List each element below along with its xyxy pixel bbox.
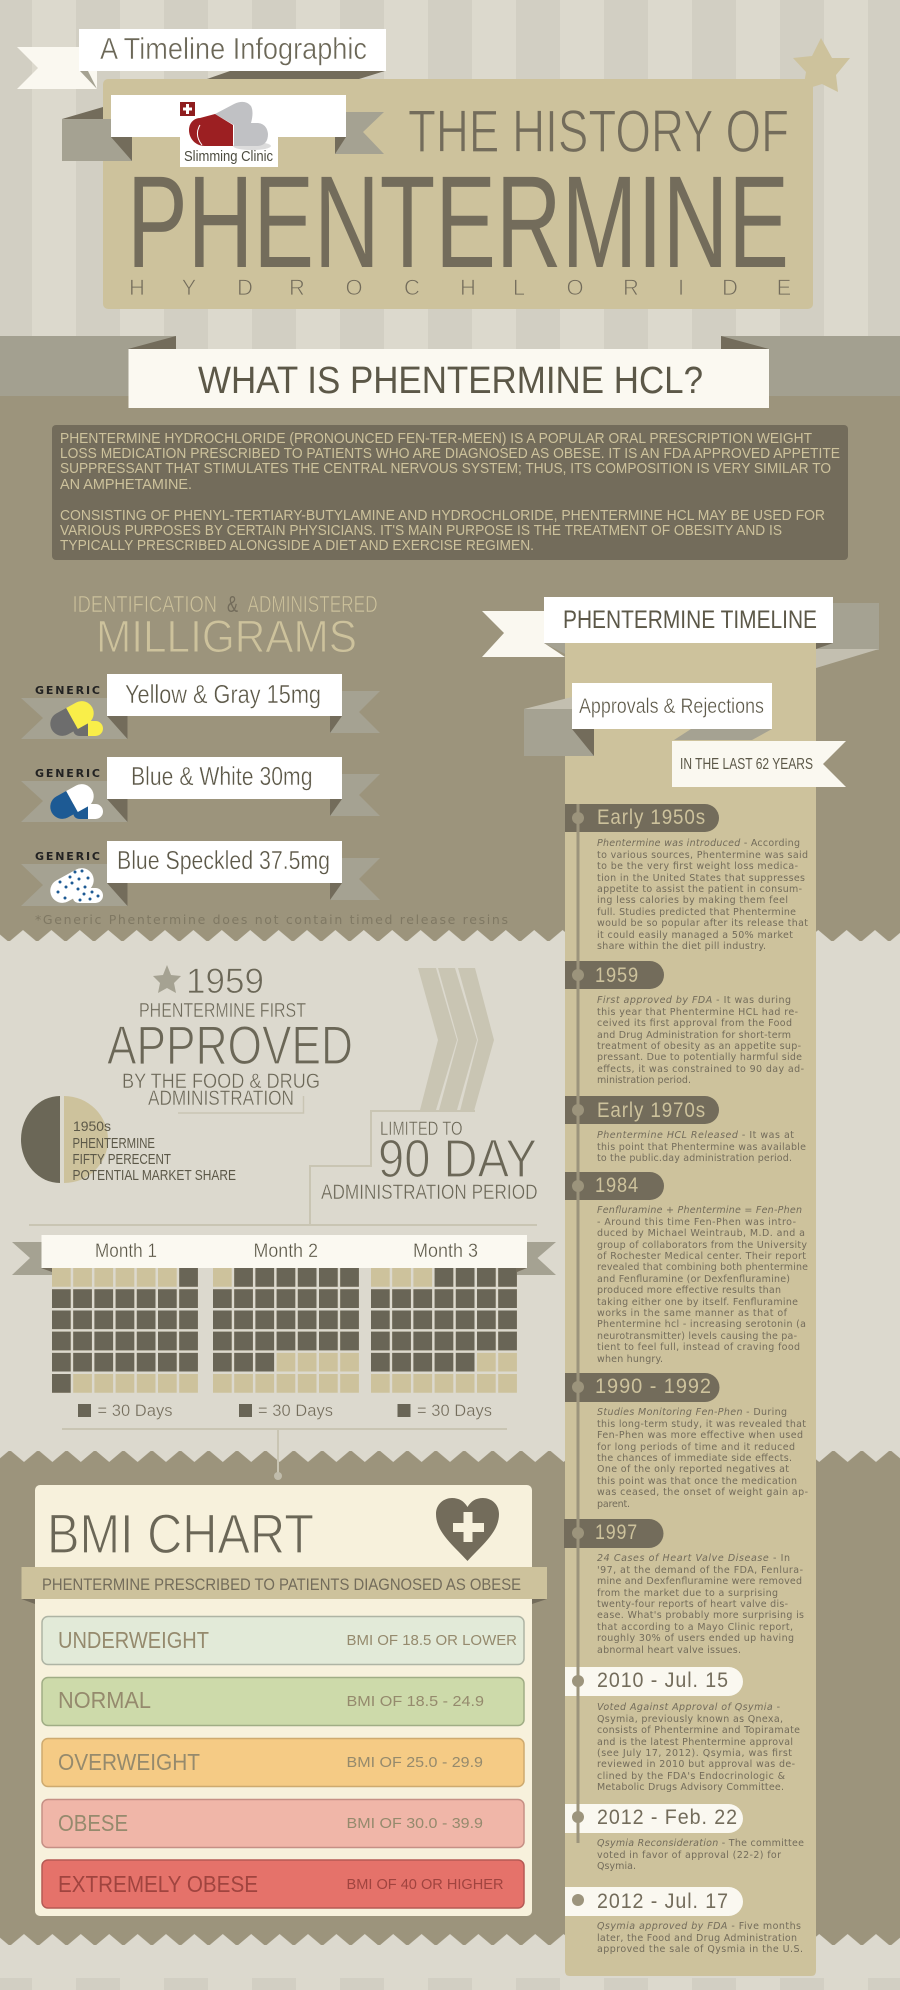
row: normal <box>42 1678 524 1726</box>
timeline entry: early 1950s: to be the very first weight loss medica- <box>597 861 798 872</box>
banner: prescribed to patients diagnosed as obese <box>22 1567 547 1604</box>
timeline entry: 1990 to 1992: Fen-Phen was more effective when used <box>597 1430 803 1441</box>
logo: slimming clinic: Slimming Clinic <box>184 148 273 165</box>
heading: approved: APPROVED <box>107 1014 353 1076</box>
text: paragraph one: LOSS MEDICATION PRESCRIBED TO PATIENTS WHO ARE DIAGNOSED AS OBESE. IT IS AN FDA APPROVED APPETITE <box>60 446 840 462</box>
timeline entry: 1984: 1984 <box>595 1174 639 1197</box>
timeline entry: early 1950s: would be so popular after its release that <box>597 918 808 929</box>
ribbon: a timeline infographic: A Timeline Infographic <box>100 31 367 66</box>
timeline entry: 1997: ease. What's probably more surprising is <box>597 1610 804 1621</box>
arrow: chevrons <box>418 968 494 1111</box>
row: overweight <box>42 1738 524 1786</box>
banner: month labels: Month 2 <box>254 1241 318 1262</box>
timeline entry: 1984: taking either one by itself. Fenfluramine <box>597 1297 798 1308</box>
row: extremely obese <box>42 1860 524 1908</box>
chart: month grids <box>12 1235 556 1420</box>
header panel <box>62 38 850 309</box>
timeline entry: 1959 <box>565 961 804 1086</box>
text: by the food and drug administration <box>122 1070 320 1110</box>
timeline entry: 1984: produced more effective results than <box>597 1285 781 1296</box>
timeline entry: 1959: First approved by FDA - It was during <box>597 995 791 1006</box>
text: phentermine first: PHENTERMINE FIRST <box>139 1000 306 1022</box>
text: paragraph two: VARIOUS PURPOSES BY CERTAIN PHYSICIANS. IT'S MAIN PURPOSE IS THE TREATMENT OF OBESITY AND IS <box>60 523 782 539</box>
timeline entry: 2010 july 15: clined by the FDA's Endocrinologic & <box>597 1771 786 1782</box>
timeline entry: 2012 february 22 <box>565 1804 804 1872</box>
timeline entry: 1997: 1997 <box>595 1521 638 1544</box>
timeline entry: 1990 to 1992: parent. <box>597 1499 630 1510</box>
timeline entry: 1997: from the market due to a surprising <box>597 1588 778 1599</box>
text: paragraph one <box>60 431 840 493</box>
timeline entry: 1990 to 1992 <box>565 1373 808 1510</box>
timeline axis with dots <box>572 804 584 1906</box>
timeline entry: 1990 to 1992: for long periods of time and it reduced <box>597 1442 795 1453</box>
timeline entry: 1984: and Fenfluramine (or Dexfenfluramine) <box>597 1274 790 1285</box>
text: limited to: LIMITED TO <box>380 1119 462 1140</box>
section: 90 day limit <box>29 1111 538 1226</box>
timeline entry: 1984: Fenfluramine + Phentermine = Fen-Phen <box>597 1205 802 1216</box>
timeline entry: 1984: of Rochester Medical center. Their report <box>597 1251 806 1262</box>
stat: 1959: 1959 <box>186 962 264 1001</box>
timeline entry: 1959: ceived its first approval from the Food <box>597 1018 792 1029</box>
row: obese: OBESE <box>58 1810 128 1836</box>
text: administration period: ADMINISTRATION PERIOD <box>321 1181 538 1204</box>
row: underweight: UNDERWEIGHT <box>58 1627 209 1653</box>
heading: identification and administered milligrams <box>72 591 378 662</box>
label: generic: GENERIC <box>35 767 100 780</box>
timeline entry: 2012 july 17: approved the sale of Qysmia in the U.S. <box>597 1944 803 1955</box>
timeline entry: 1984: - Around this time Fen-Phen was intro- <box>597 1217 796 1228</box>
text: by the food and drug administration: BY THE FOOD & DRUG <box>122 1070 320 1093</box>
timeline entry: 1984: revealed that combining both phentermine <box>597 1262 808 1273</box>
banner: phentermine timeline <box>482 597 879 668</box>
banner: in the last 62 years: IN THE LAST 62 YEARS <box>680 756 813 773</box>
timeline entry: 2010 july 15: reviewed in 2010 but approval was de- <box>597 1759 795 1770</box>
row: normal: BMI OF 18.5 - 24.9 <box>346 1693 484 1710</box>
timeline entry: 1997 <box>564 1519 804 1656</box>
row: overweight: OVERWEIGHT <box>58 1749 200 1775</box>
banner: prescribed to patients diagnosed as obese: PHENTERMINE PRESCRIBED TO PATIENTS DIAGNOSED AS OBESE <box>42 1575 521 1594</box>
timeline entry: 1959: ministration period. <box>597 1075 691 1086</box>
banner: what is phentermine hcl <box>128 336 769 408</box>
timeline entry: 2010 july 15: (see July 17, 2012). Qsymia, was first <box>597 1748 792 1759</box>
connector to bmi chart <box>62 1428 507 1480</box>
heading: bmi chart: BMI CHART <box>47 1502 314 1565</box>
row: extremely obese: EXTREMELY OBESE <box>58 1871 258 1897</box>
timeline entry: early 1950s: appetite to assist the patient in consum- <box>597 884 802 895</box>
label: blue speckled 37.5mg: Blue Speckled 37.5mg <box>117 845 330 875</box>
timeline entry: 1959: this year that Phentermine HCL had re- <box>597 1007 798 1018</box>
icon: blue and white capsule <box>50 784 103 819</box>
timeline entry: 1997: roughly 30% of users ended up having <box>597 1633 794 1644</box>
chart: fifty percent pie: FIFTY PERECENT <box>72 1151 171 1168</box>
timeline entry: 1997: 24 Cases of Heart Valve Disease - In <box>597 1553 790 1564</box>
banner: approvals and rejections: Approvals & Rejections <box>579 695 764 718</box>
ribbon: logo right tail <box>335 112 384 154</box>
timeline entry: 1984: works in the same manner as that of <box>597 1308 788 1319</box>
pill row: blue speckled <box>21 841 380 906</box>
row: obese <box>42 1800 524 1848</box>
ribbon: timeline infographic fold <box>207 71 385 79</box>
timeline entry: 1997: twenty-four reports of heart valve dis- <box>597 1599 788 1610</box>
timeline entry: early 1970s: Phentermine HCL Released - It was at <box>597 1130 794 1141</box>
legend: 30 days: = 30 Days <box>98 1401 172 1420</box>
label: generic: GENERIC <box>35 850 100 863</box>
text: paragraph two: TYPICALLY PRESCRIBED ALONGSIDE A DIET AND EXERCISE REGIMEN. <box>60 538 534 554</box>
timeline entry: 1984: when hungry. <box>597 1354 663 1365</box>
timeline entry: 2012 february 22: voted in favor of approval (22-2) for <box>597 1850 781 1861</box>
timeline entry: 2010 july 15: and is the latest Phentermine approval <box>597 1737 793 1748</box>
chart: fifty percent pie: PHENTERMINE <box>72 1135 155 1152</box>
timeline entry: early 1950s: ing less calories by making them feel <box>597 895 788 906</box>
banner: what is phentermine hcl: WHAT IS PHENTERMINE HCL? <box>198 360 703 402</box>
timeline entry: early 1970s: to the public.day administration period. <box>597 1153 792 1164</box>
icon: star <box>153 965 181 993</box>
logo: slimming clinic <box>111 95 346 167</box>
timeline entry: early 1950s: tion in the United States that suppresses <box>597 873 805 884</box>
legend: 30 days <box>78 1401 492 1420</box>
timeline entry: 1984 <box>565 1172 808 1365</box>
timeline entry: 2012 february 22: 2012 - Feb. 22 <box>597 1806 738 1829</box>
legend: 30 days: = 30 Days <box>417 1401 492 1420</box>
icon: heart with plus <box>436 1498 499 1561</box>
heading: identification and administered milligrams: & <box>227 591 238 617</box>
ribbon: a timeline infographic <box>17 29 386 89</box>
timeline entry: 1990 to 1992: this long-term study, it was revealed that <box>597 1419 806 1430</box>
banner: in the last 62 years <box>672 741 846 787</box>
timeline entry: 1990 to 1992: the chances of immediate side effects. <box>597 1453 792 1464</box>
grid: month 2 <box>213 1277 359 1383</box>
timeline entry: early 1950s: Phentermine was introduced - According <box>597 838 800 849</box>
heading: the history of: THE HISTORY OF <box>408 98 789 165</box>
timeline entry: 1984: group of collaborators from the University <box>597 1240 807 1251</box>
panel: description <box>52 425 848 560</box>
row: underweight: BMI OF 18.5 OR LOWER <box>346 1632 517 1649</box>
icon: speckled capsule <box>50 868 103 903</box>
timeline entry: 2012 july 17: 2012 - Jul. 17 <box>597 1890 729 1913</box>
timeline entry: 2010 july 15: 2010 - Jul. 15 <box>597 1669 729 1692</box>
grid: month 1 <box>52 1277 198 1383</box>
timeline entry: 1959: 1959 <box>595 964 639 987</box>
heading: identification and administered milligrams: MILLIGRAMS <box>96 611 357 662</box>
timeline entry: 1990 to 1992: One of the only reported negatives at <box>597 1464 789 1475</box>
timeline entry: 2012 february 22: Qsymia. <box>597 1861 636 1872</box>
text: paragraph two <box>60 508 825 554</box>
stat: 90 day: 90 DAY <box>378 1129 537 1189</box>
timeline entry: 1959: pressant. Due to potentially harmful side <box>597 1052 802 1063</box>
icon: star <box>793 38 850 92</box>
banner: approvals and rejections <box>524 683 772 756</box>
timeline entry: 2012 july 17: Qsymia approved by FDA - Five months <box>597 1921 801 1932</box>
row: normal: NORMAL <box>58 1687 151 1713</box>
heading: hydrochloride: HYDROCHLORIDE <box>129 275 791 300</box>
timeline entry: early 1950s: it could easily managed a 50% market <box>597 930 793 941</box>
ribbon tails <box>12 1242 60 1275</box>
timeline entry: 1990 to 1992: was ceased, the onset of weight gain ap- <box>597 1487 808 1498</box>
section: 1959 first approved <box>107 962 353 1113</box>
timeline entry: 2010 july 15 <box>565 1667 800 1793</box>
timeline entry: 2010 july 15: Qsymia, previously known as Qnexa, <box>597 1714 783 1725</box>
text: paragraph one: AN AMPHETAMINE. <box>60 477 192 493</box>
timeline entry: 2012 february 22: Qsymia Reconsideration - The committee <box>597 1838 804 1849</box>
text: paragraph one: PHENTERMINE HYDROCHLORIDE (PRONOUNCED FEN-TER-MEEN) IS A POPULAR ORAL PRESCRIPTION WEIGHT <box>60 431 812 447</box>
column: timeline background <box>565 640 816 1976</box>
grid: month 3 <box>371 1277 517 1383</box>
timeline entry: early 1970s <box>565 1096 806 1164</box>
banner: month labels: Month 3 <box>413 1241 478 1262</box>
timeline entry: 1997: abnormal heart valve issues. <box>597 1645 741 1656</box>
chart: fifty percent pie <box>21 1096 236 1184</box>
timeline entry: 2010 july 15: Voted Against Approval of Qsymia - <box>597 1702 780 1713</box>
timeline entry: 1990 to 1992: 1990 - 1992 <box>595 1375 712 1398</box>
legend: 30 days: = 30 Days <box>258 1401 333 1420</box>
timeline entry: 1984: duced by Michael Weintraub, M.D. and a <box>597 1228 805 1239</box>
timeline entry: 1959: treatment of obesity as an appetite sup- <box>597 1041 801 1052</box>
row: underweight <box>42 1616 524 1664</box>
row: extremely obese: BMI OF 40 OR HIGHER <box>346 1876 504 1893</box>
banner: phentermine timeline: PHENTERMINE TIMELINE <box>563 606 817 634</box>
label: yellow and gray 15mg: Yellow & Gray 15mg <box>125 679 321 709</box>
ribbon: logo left fold <box>62 107 132 161</box>
timeline entry: early 1970s: Early 1970s <box>597 1099 706 1122</box>
footnote: generic phentermine: *Generic Phentermine does not contain timed release resins <box>35 912 508 927</box>
row: overweight: BMI OF 25.0 - 29.9 <box>346 1754 483 1771</box>
timeline entry: early 1950s: Early 1950s <box>597 806 706 829</box>
title panel background <box>103 79 813 309</box>
timeline entry: 2012 july 17: later, the Food and Drug Administration <box>597 1933 797 1944</box>
timeline entry: early 1950s: full. Studies predicted that Phentermine <box>597 907 796 918</box>
text: paragraph one: SUPPRESSANT THAT STIMULATES THE CENTRAL NERVOUS SYSTEM; THUS, ITS COMPOSITION IS VERY SIMILAR TO <box>60 461 831 477</box>
timeline entry: early 1950s: to various sources, Phentermine was said <box>597 850 808 861</box>
timeline entry: early 1950s <box>565 804 808 952</box>
timeline entry: 1990 to 1992: Studies Monitoring Fen-Phen - During <box>597 1407 787 1418</box>
chart: fifty percent pie: POTENTIAL MARKET SHARE <box>72 1167 236 1184</box>
timeline entry: 1984: tient to feel full, instead of craving food <box>597 1342 800 1353</box>
heading: identification and administered milligrams: ADMINISTERED <box>248 591 378 617</box>
timeline entry: 1997: '97, at the demand of the FDA, Fenlura- <box>597 1565 803 1576</box>
pill row: yellow and gray <box>21 674 380 739</box>
timeline entry: 1984: Phentermine hcl - increasing serotonin (a <box>597 1319 806 1330</box>
timeline entry: early 1950s: share within the diet pill industry. <box>597 941 766 952</box>
timeline entry: 1959: and Drug Administration for short-term <box>597 1030 791 1041</box>
label: generic: GENERIC <box>35 684 100 697</box>
pill row: blue and white <box>21 757 380 822</box>
timeline entry: 1984: neurotransmitter) levels causing the pa- <box>597 1331 797 1342</box>
timeline entry: 1959: effects, it was constrained to 90 day ad- <box>597 1064 804 1075</box>
heading: identification and administered milligrams: IDENTIFICATION <box>72 591 217 617</box>
timeline entry: 2012 july 17 <box>565 1887 803 1955</box>
row: obese: BMI OF 30.0 - 39.9 <box>346 1815 483 1832</box>
panel: bmi chart <box>22 1485 547 1916</box>
text: by the food and drug administration: ADMINISTRATION <box>148 1087 294 1110</box>
timeline entry: 1990 to 1992: this point was that once the medication <box>597 1476 797 1487</box>
icon: yellow and gray capsule <box>50 701 103 736</box>
timeline entry: 2010 july 15: consists of Phentermine and Topiramate <box>597 1725 800 1736</box>
timeline entry: 2010 july 15: Metabolic Drugs Advisory Committee. <box>597 1782 784 1793</box>
label: blue and white 30mg: Blue & White 30mg <box>131 761 312 791</box>
banner: month labels <box>42 1235 527 1268</box>
banner: month labels: Month 1 <box>95 1241 157 1262</box>
timeline entry: early 1970s: this point that Phentermine was available <box>597 1142 806 1153</box>
chart: fifty percent pie: 1950s <box>73 1118 111 1134</box>
timeline entry: 1997: mine and Dexfenfluramine were removed <box>597 1576 802 1587</box>
text: paragraph two: CONSISTING OF PHENYL-TERTIARY-BUTYLAMINE AND HYDROCHLORIDE, PHENTERMINE HCL MAY BE USED FOR <box>60 508 825 524</box>
timeline entry: 1997: that according to a Mayo Clinic report, <box>597 1622 793 1633</box>
